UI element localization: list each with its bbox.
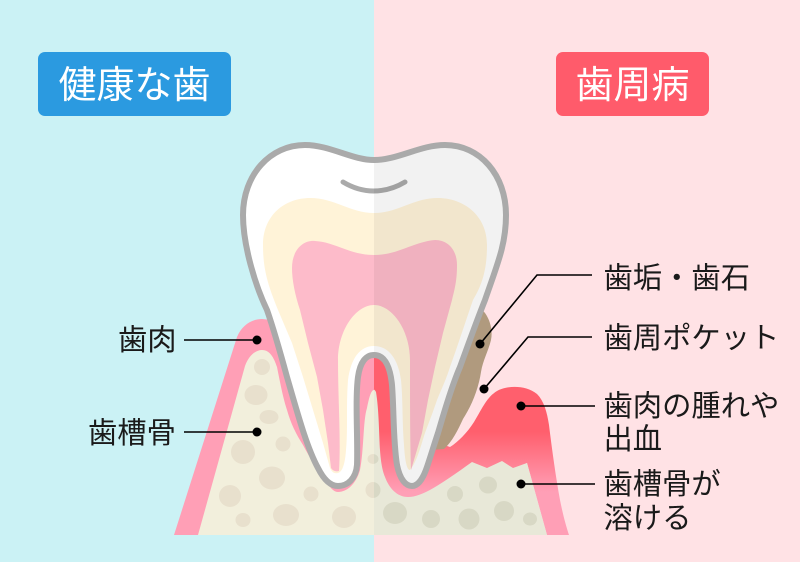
alveolar bone: diseased side <box>366 389 547 535</box>
callout: periodontal pocket: 歯周ポケット <box>604 322 779 355</box>
callout: plaque and tartar: 歯垢・歯石 <box>604 262 750 295</box>
heading: periodontal disease: 歯周病 <box>575 65 690 107</box>
panel: healthy background <box>0 0 374 562</box>
callout: gum: 歯肉 <box>118 324 177 357</box>
heading: healthy tooth: 健康な歯 <box>58 65 211 107</box>
callout: gum swelling and bleeding: 歯肉の腫れや <box>604 390 779 423</box>
gum: diseased side with swelling <box>368 345 569 535</box>
tooth enamel <box>243 145 506 486</box>
callout: gum swelling and bleeding <box>516 390 779 456</box>
tooth outline <box>243 145 506 486</box>
callout: bone dissolving <box>516 468 721 535</box>
callout: gum swelling and bleeding: 出血 <box>604 423 662 456</box>
tartar deposit <box>430 305 492 450</box>
dentin <box>263 198 487 473</box>
alveolar bone: healthy side <box>198 350 380 535</box>
bone spots: diseased side <box>366 454 537 530</box>
callout: periodontal pocket <box>480 322 779 394</box>
bone spots: healthy side <box>219 359 380 528</box>
heading: healthy tooth <box>38 52 231 116</box>
heading: periodontal disease <box>556 52 709 116</box>
tooth <box>243 145 506 486</box>
callout: plaque and tartar <box>476 262 750 348</box>
gum: healthy side <box>174 319 380 535</box>
callout: gum <box>118 324 262 357</box>
occlusal groove <box>343 182 405 191</box>
callout: alveolar bone <box>88 417 262 450</box>
callout: bone dissolving: 溶ける <box>604 502 691 535</box>
panel: periodontal disease background <box>374 0 800 562</box>
callout: alveolar bone: 歯槽骨 <box>88 417 176 450</box>
pulp <box>292 240 457 471</box>
shaded right half of tooth <box>374 148 503 483</box>
callout: bone dissolving: 歯槽骨が <box>604 468 721 501</box>
